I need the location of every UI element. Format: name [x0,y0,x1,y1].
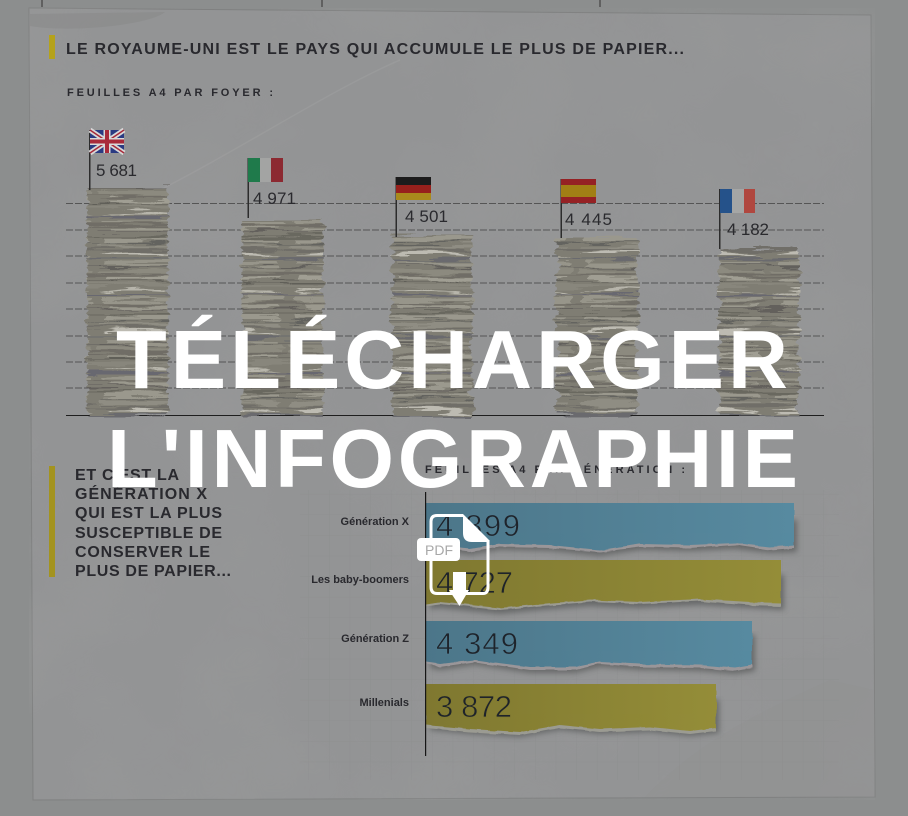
icon: PDF download: PDF [425,542,453,558]
icon: French flag [720,189,755,213]
icon: German flag [396,177,431,200]
bar: Génération Z [426,621,755,674]
callout: generation X: CONSERVER LE [75,544,210,561]
category labels: Millenials [359,697,409,709]
bar: Les baby-boomers: 4 727 [436,565,513,600]
chart: A4 sheets per household [66,130,824,416]
download title overlay: L'INFOGRAPHIE [107,412,798,505]
column: United Kingdom [87,130,168,416]
callout: generation X: ET C'EST LA [75,467,179,484]
category labels [311,516,410,709]
callout: generation X: PLUS DE PAPIER... [75,563,231,580]
callout: generation X [49,466,231,580]
callout: generation X: QUI EST LA PLUS [75,505,222,522]
column: France: 4 182 [727,220,769,239]
category labels: Génération X [341,516,410,528]
column: Italy: 4 971 [253,189,296,208]
category labels: Les baby-boomers [311,574,409,586]
bar: Génération X: 4 899 [436,508,520,543]
category labels: Génération Z [341,633,409,645]
chart subtitle: sheets by generation: FEUILLES A4 PAR GÉNÉRATION : [425,463,685,476]
column: Germany [392,177,472,416]
bar: Les baby-boomers [426,560,784,614]
icon: Italian flag [248,158,283,182]
section heading: country ranking: LE ROYAUME-UNI EST LE PAYS QUI ACCUMULE LE PLUS DE PAPIER... [66,41,684,58]
graph paper grid [300,490,839,780]
bar: Millenials: 3 872 [436,689,512,724]
chart subtitle: sheets per household: FEUILLES A4 PAR FOYER : [67,87,273,99]
column: Germany: 4 501 [405,207,448,226]
column: Spain [557,179,637,416]
column: Spain: 4 445 [565,210,612,229]
icon: PDF download [417,514,489,606]
column: France [719,189,799,416]
chart: A4 sheets by generation [311,492,797,756]
column: United Kingdom: 5 681 [96,161,137,180]
section heading: country ranking [49,35,684,59]
previous section ticks [42,0,600,7]
icon: UK flag [90,130,124,153]
column: Italy [242,158,323,416]
gridlines and baseline [66,204,824,416]
bar: Millenials [426,684,719,737]
bar: Génération Z: 4 349 [436,626,518,661]
bar: Génération X [426,503,797,556]
icon: Spanish flag [561,179,596,203]
callout: generation X: GÉNÉRATION X [75,484,207,503]
callout: generation X: SUSCEPTIBLE DE [75,525,222,542]
download title overlay: TÉLÉCHARGER [116,313,788,406]
download title overlay [107,313,798,505]
